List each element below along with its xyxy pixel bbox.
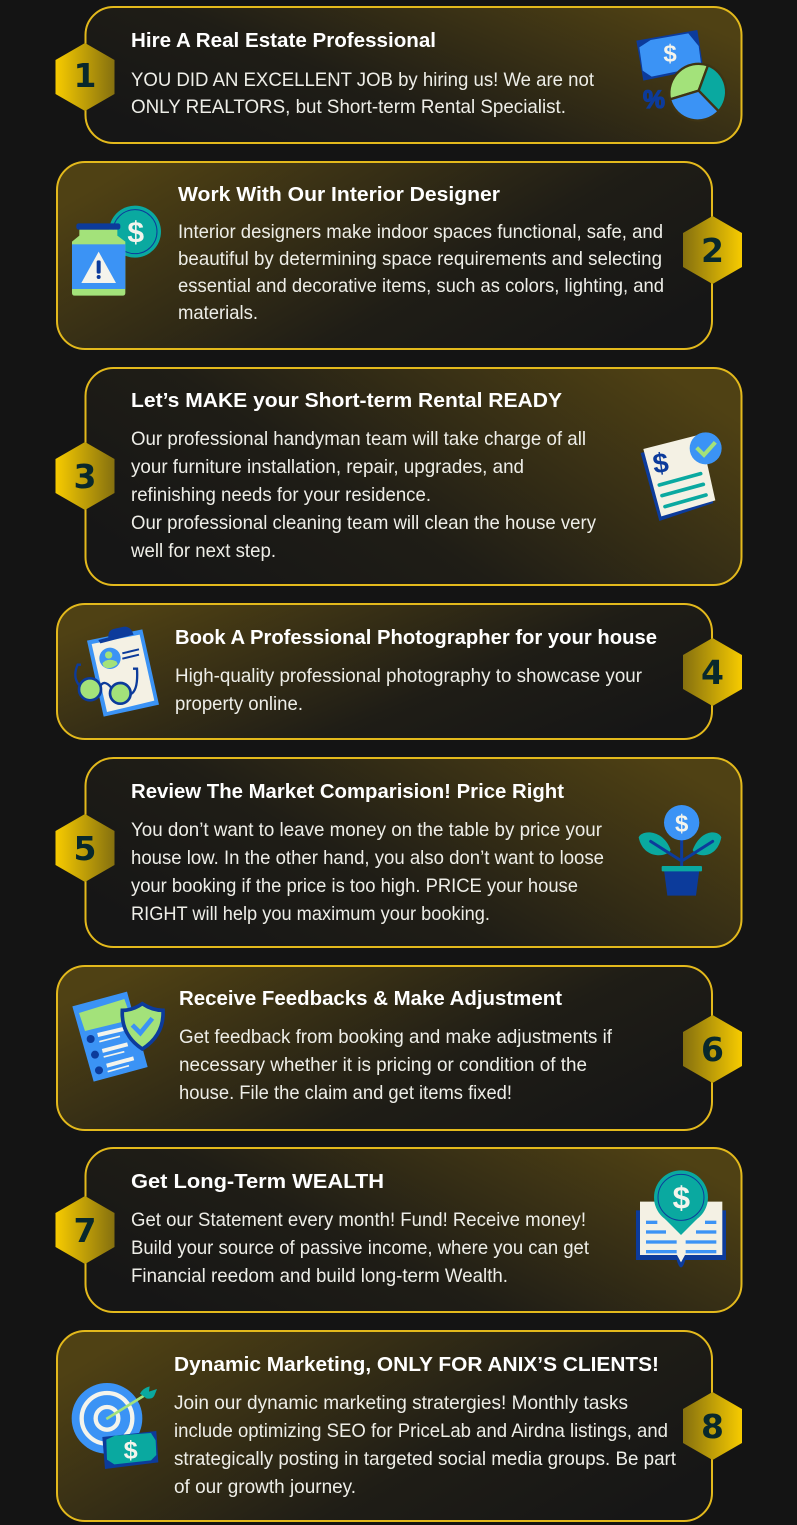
icon: money plant: [639, 805, 721, 896]
body text: property online.: [175, 693, 303, 715]
number badge 8: [683, 1392, 742, 1460]
body text: of our growth journey.: [174, 1476, 356, 1498]
icon: jar with warning and coin: [72, 206, 161, 296]
heading: Review The Market Comparision! Price Right: [131, 781, 564, 803]
number badge 2: 2: [701, 231, 724, 270]
icon: book with dollar pin: $: [673, 1180, 690, 1215]
body text: [178, 221, 664, 324]
body text: beautiful by determining space requirements and selecting: [178, 248, 662, 270]
body text: necessary whether it is pricing or condition of the: [179, 1054, 587, 1076]
body text: Get our Statement every month! Fund! Receive money!: [131, 1209, 586, 1231]
body text: Financial reedom and build long-term Wealth.: [131, 1265, 508, 1287]
icon: target with arrow and money: [72, 1383, 158, 1469]
body text: RIGHT will help you maximum your booking.: [131, 903, 490, 925]
icon: clipboard and glasses: [75, 627, 159, 717]
body text: Our professional handyman team will take charge of all: [131, 428, 586, 450]
body text: [131, 819, 604, 925]
icon: invoice with check: $: [651, 447, 671, 480]
icon: jar with warning and coin: $: [127, 216, 144, 249]
panel: step 1: [56, 7, 742, 143]
body text: [174, 1392, 677, 1498]
body text: well for next step.: [130, 540, 276, 562]
number badge 4: 4: [701, 653, 724, 692]
body text: Get feedback from booking and make adjustments if: [179, 1026, 613, 1048]
body text: Build your source of passive income, where you can get: [131, 1237, 590, 1259]
number badge 2: [683, 216, 742, 284]
body text: You don’t want to leave money on the table by price your: [131, 819, 602, 841]
body text: YOU DID AN EXCELLENT JOB by hiring us! We are not: [131, 69, 595, 91]
number badge 1: [56, 43, 114, 111]
body text: [131, 1209, 590, 1287]
heading: Get Long-Term WEALTH: [131, 1171, 384, 1193]
number badge 8: 8: [701, 1407, 724, 1446]
body text: your booking if the price is too high. PRICE your house: [131, 875, 578, 897]
number badge 3: 3: [74, 457, 96, 496]
body text: house low. In the other hand, you also don’t want to loose: [131, 847, 604, 869]
body text: [175, 665, 642, 715]
icon: invoice with check: [641, 432, 722, 521]
body text: include optimizing SEO for PriceLab and Airdna listings, and: [174, 1420, 668, 1442]
heading: Receive Feedbacks & Make Adjustment: [179, 988, 562, 1010]
body text: [130, 428, 596, 562]
panel: step 7: [56, 1148, 742, 1312]
icon: money and pie chart: %: [643, 87, 665, 114]
number badge 3: [56, 442, 114, 510]
heading: Let’s MAKE your Short-term Rental READY: [131, 390, 563, 412]
panel: step 8: [57, 1331, 742, 1521]
number badge 5: 5: [74, 829, 96, 868]
number badge 4: [683, 638, 742, 706]
icon: money and pie chart: $: [663, 41, 677, 68]
body text: [131, 69, 595, 118]
icon: document with shield: [72, 992, 163, 1082]
heading: Work With Our Interior Designer: [178, 184, 500, 206]
heading: Hire A Real Estate Professional: [131, 30, 436, 52]
number badge 7: [56, 1196, 114, 1264]
number badge 6: 6: [701, 1030, 724, 1069]
panel: step 2: [57, 162, 742, 349]
body text: Our professional cleaning team will clean the house very: [131, 512, 596, 534]
body text: house. File the claim and get items fixed!: [179, 1082, 512, 1104]
panel: step 6: [57, 966, 742, 1130]
body text: Interior designers make indoor spaces functional, safe, and: [178, 221, 663, 243]
heading: Dynamic Marketing, ONLY FOR ANIX’S CLIENTS!: [174, 1354, 659, 1376]
heading: Book A Professional Photographer for your house: [175, 627, 657, 649]
icon: book with dollar pin: [636, 1170, 726, 1267]
body text: refinishing needs for your residence.: [131, 484, 431, 506]
panel: step 5: [56, 758, 742, 947]
body text: materials.: [178, 302, 258, 324]
number badge 7: 7: [74, 1211, 96, 1250]
panel: step 3: [56, 368, 742, 585]
body text: Join our dynamic marketing stratergies! Monthly tasks: [174, 1392, 628, 1414]
body text: your furniture installation, repair, upgrades, and: [131, 456, 524, 478]
icon: money plant: $: [675, 810, 688, 837]
body text: strategically posting in targeted social media groups. Be part: [174, 1448, 677, 1470]
number badge 1: 1: [74, 56, 96, 95]
panel: step 4: [57, 604, 742, 739]
number badge 6: [683, 1015, 742, 1083]
number badge 5: [56, 814, 114, 882]
icon: money and pie chart: [636, 30, 726, 120]
body text: ONLY REALTORS, but Short-term Rental Specialist.: [131, 96, 566, 118]
body text: essential and decorative items, such as colors, lighting, and: [178, 275, 664, 297]
body text: [179, 1026, 613, 1104]
body text: High-quality professional photography to showcase your: [175, 665, 642, 687]
icon: target with arrow and money: $: [124, 1436, 138, 1464]
